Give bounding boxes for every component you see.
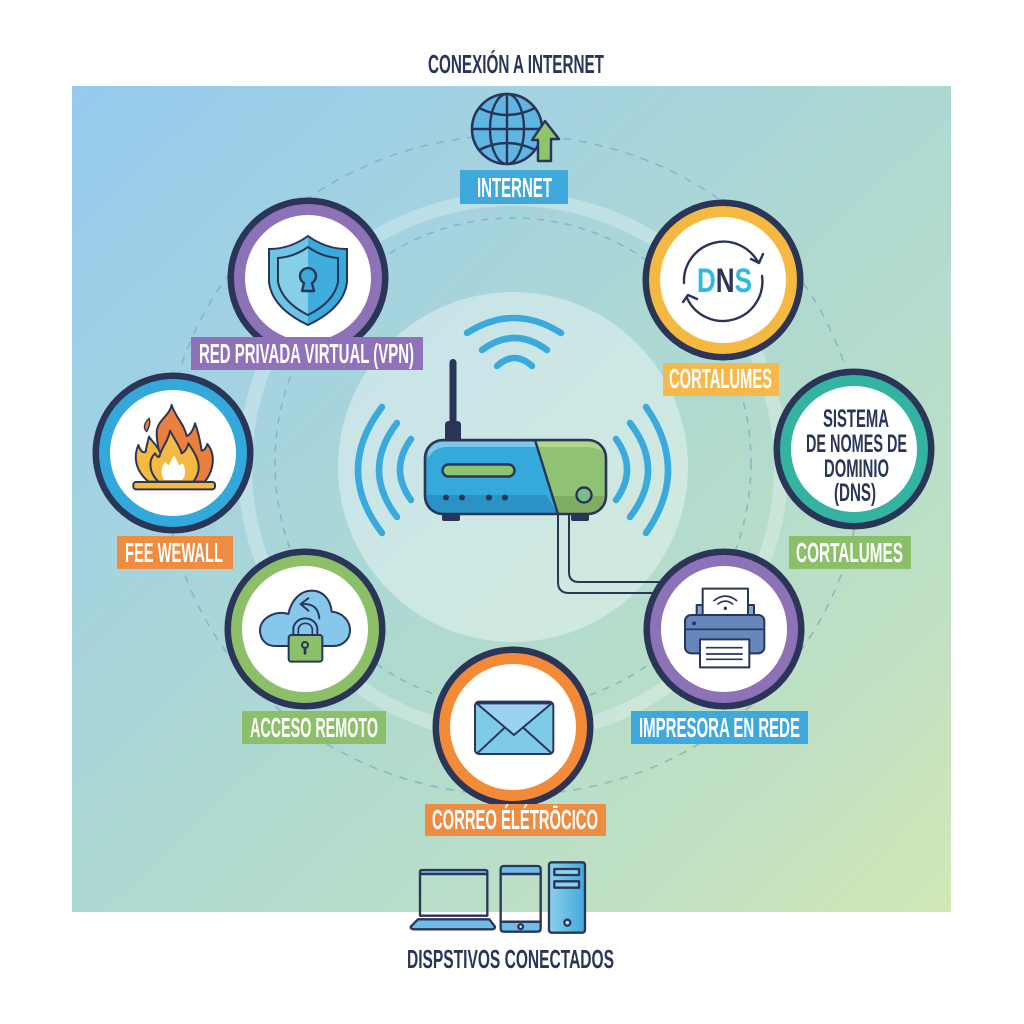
node: remote access bbox=[228, 552, 382, 706]
label: network printer bbox=[631, 711, 808, 744]
icon: cloud with padlock bbox=[260, 591, 350, 662]
label: cortalumes (yellow): CORTALUMES bbox=[669, 363, 772, 394]
node: email bbox=[436, 650, 590, 804]
node text: DOMINIO bbox=[824, 455, 889, 483]
caption: connected devices: DISPSTIVOS CONECTADOS bbox=[407, 944, 614, 974]
icon: connected devices bbox=[411, 862, 585, 933]
icon: DNS arrows bbox=[683, 242, 763, 321]
label: internet bbox=[460, 170, 568, 204]
node text: (DNS) bbox=[834, 479, 876, 507]
node text: SISTEMA bbox=[823, 405, 889, 433]
tablet bbox=[501, 866, 541, 932]
icon: printer bbox=[685, 589, 764, 667]
label: internet: INTERNET bbox=[477, 172, 552, 203]
node text: DE NOMES DE bbox=[806, 430, 907, 458]
router bbox=[425, 359, 606, 521]
title: CONEXIÓN A INTERNET bbox=[428, 49, 604, 79]
label: firewall bbox=[117, 536, 233, 569]
icon: envelope bbox=[475, 702, 553, 754]
background panel bbox=[72, 86, 951, 912]
icon: globe with upload arrow bbox=[472, 94, 559, 164]
concentric network rings bbox=[165, 135, 861, 795]
label: cortalumes (yellow) bbox=[663, 363, 779, 396]
node: VPN bbox=[231, 201, 385, 355]
node text bbox=[806, 405, 907, 507]
label: remote access: ACCESO REMOTO bbox=[250, 712, 378, 743]
laptop bbox=[411, 870, 495, 929]
label: cortalumes (green) bbox=[789, 536, 911, 569]
label: VPN: RED PRIVADA VIRTUAL (VPN) bbox=[199, 338, 414, 369]
label: network printer: IMPRESORA EN REDE bbox=[639, 712, 800, 743]
label: cortalumes (green): CORTALUMES bbox=[796, 537, 903, 568]
icon: flame bbox=[133, 405, 215, 489]
node: domain name system bbox=[777, 372, 931, 526]
node: network printer bbox=[647, 552, 801, 706]
label: remote access bbox=[242, 711, 386, 744]
label: firewall: FEE WEWALL bbox=[125, 537, 223, 568]
cables from router to printer bbox=[558, 513, 665, 593]
label: email: CORREO ÉLÉTRŌCICO bbox=[432, 804, 598, 835]
label: email bbox=[425, 804, 606, 836]
node: firewall bbox=[96, 376, 250, 530]
label: VPN bbox=[191, 337, 423, 370]
desktop tower bbox=[549, 862, 585, 933]
router wifi waves bbox=[358, 318, 668, 533]
DNS letters: DNS bbox=[697, 262, 752, 300]
node: DNS icon bbox=[646, 203, 800, 357]
icon: shield bbox=[269, 236, 347, 325]
